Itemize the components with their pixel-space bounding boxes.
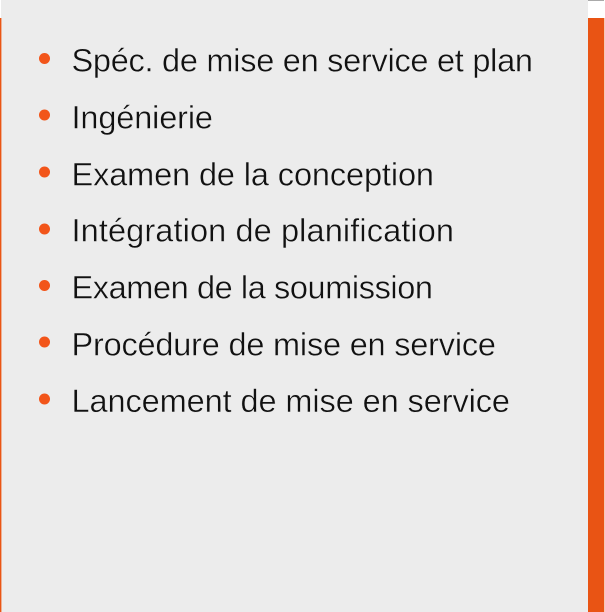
bullet list <box>39 42 533 419</box>
item 4: Intégration de planification <box>72 212 454 248</box>
left orange edge <box>0 0 1 612</box>
right orange bar <box>588 18 605 612</box>
item 3: Examen de la conception <box>72 156 434 192</box>
item 2: Ingénierie <box>72 100 213 136</box>
item 1: Spéc. de mise en service et plan <box>72 42 533 78</box>
item 5: Examen de la soumission <box>72 270 433 306</box>
item 6: Procédure de mise en service <box>72 326 496 362</box>
item 7: Lancement de mise en service <box>72 383 510 419</box>
top right corner <box>588 0 605 18</box>
